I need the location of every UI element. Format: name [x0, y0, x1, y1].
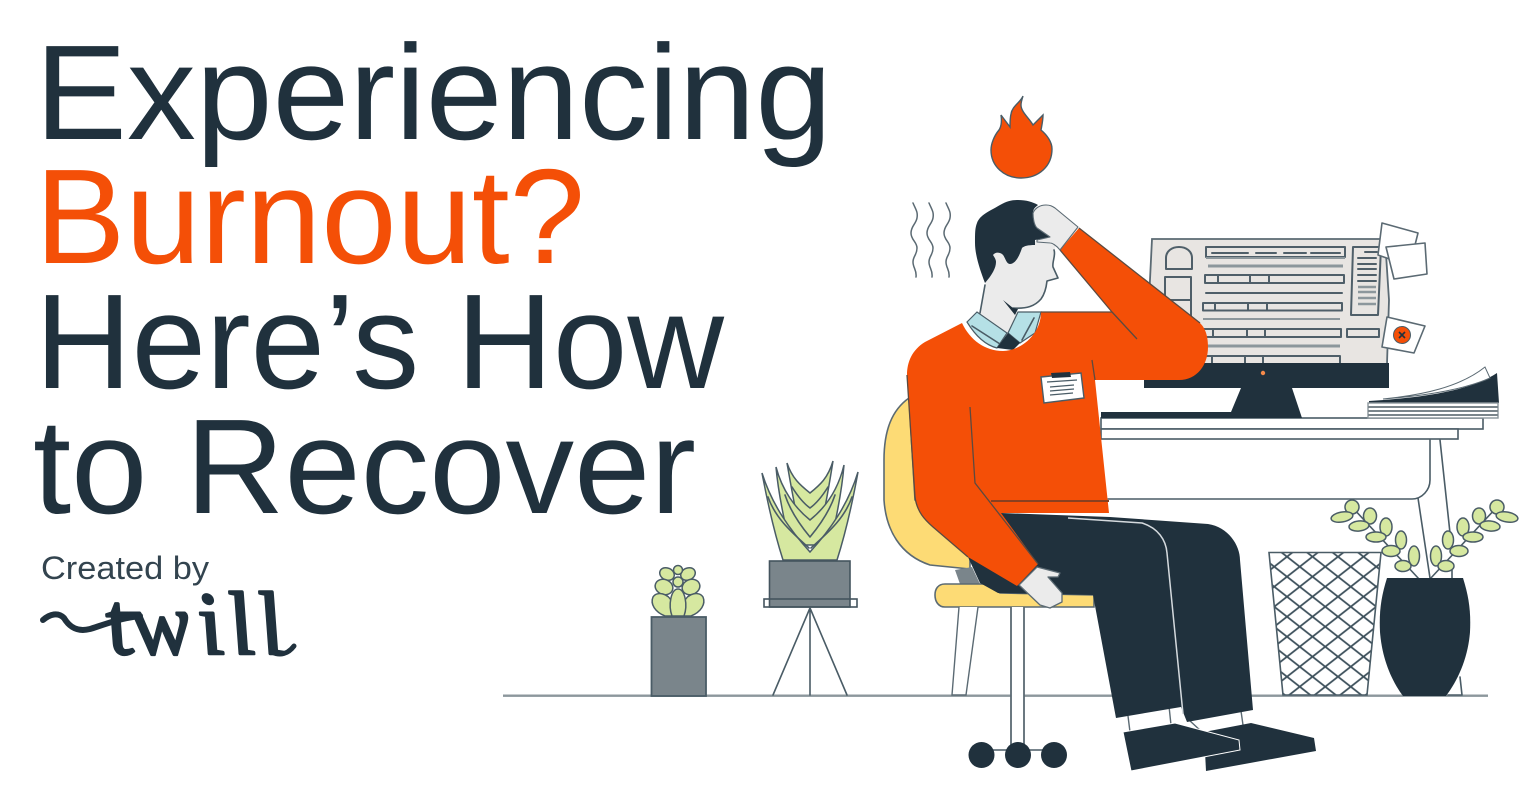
chair backrest: [884, 398, 970, 569]
orange sweater: [907, 228, 1208, 586]
chair seat: [935, 584, 1094, 607]
desk: [1101, 418, 1483, 695]
monitor screen: [1148, 239, 1389, 364]
chair pole: [1011, 607, 1024, 748]
monitor power light: [1261, 371, 1265, 375]
person: [907, 200, 1316, 771]
floor line: [503, 694, 1488, 697]
wastebasket: [1269, 552, 1381, 695]
chair wheels: [968, 742, 1067, 768]
plant: small succulent in pot: [652, 565, 706, 696]
icon: stress squiggles: [911, 203, 950, 277]
stack of papers: [1368, 367, 1499, 418]
chair back leg: [952, 607, 978, 695]
upper hand: [1033, 205, 1078, 250]
chair: [884, 398, 1094, 768]
left shoe: [1123, 723, 1240, 771]
lower hand: [1019, 567, 1062, 608]
trousers: [968, 513, 1253, 722]
plant: dark vase with branches: [1330, 500, 1519, 696]
credit: created by: Created by: [41, 550, 209, 586]
logo: twill: twill: [92, 574, 295, 674]
sticky notes: [1378, 223, 1427, 279]
name badge: [1041, 372, 1084, 403]
sticker with red x: [1382, 317, 1425, 353]
title: Experiencing: [35, 17, 832, 168]
socks: [1128, 706, 1243, 732]
icon: fire above head: [991, 96, 1052, 178]
chair connector: [955, 567, 980, 584]
collar: [967, 312, 1041, 350]
right shoe: [1204, 723, 1316, 771]
title: to Recover: [33, 391, 696, 542]
neck and face: [980, 238, 1058, 333]
face profile line: [980, 250, 1058, 313]
title: [33, 17, 832, 542]
hair: [975, 200, 1050, 283]
monitor bezel and stand: [1101, 363, 1389, 418]
monitor: [1101, 239, 1389, 418]
chin shadow: [1003, 300, 1018, 315]
trouser seam: [1068, 518, 1183, 714]
sweater details: [907, 228, 1200, 564]
plant: aloe on tripod stand: [762, 461, 858, 695]
title: Here’s How: [35, 266, 724, 417]
title: Burnout?: [35, 141, 585, 292]
